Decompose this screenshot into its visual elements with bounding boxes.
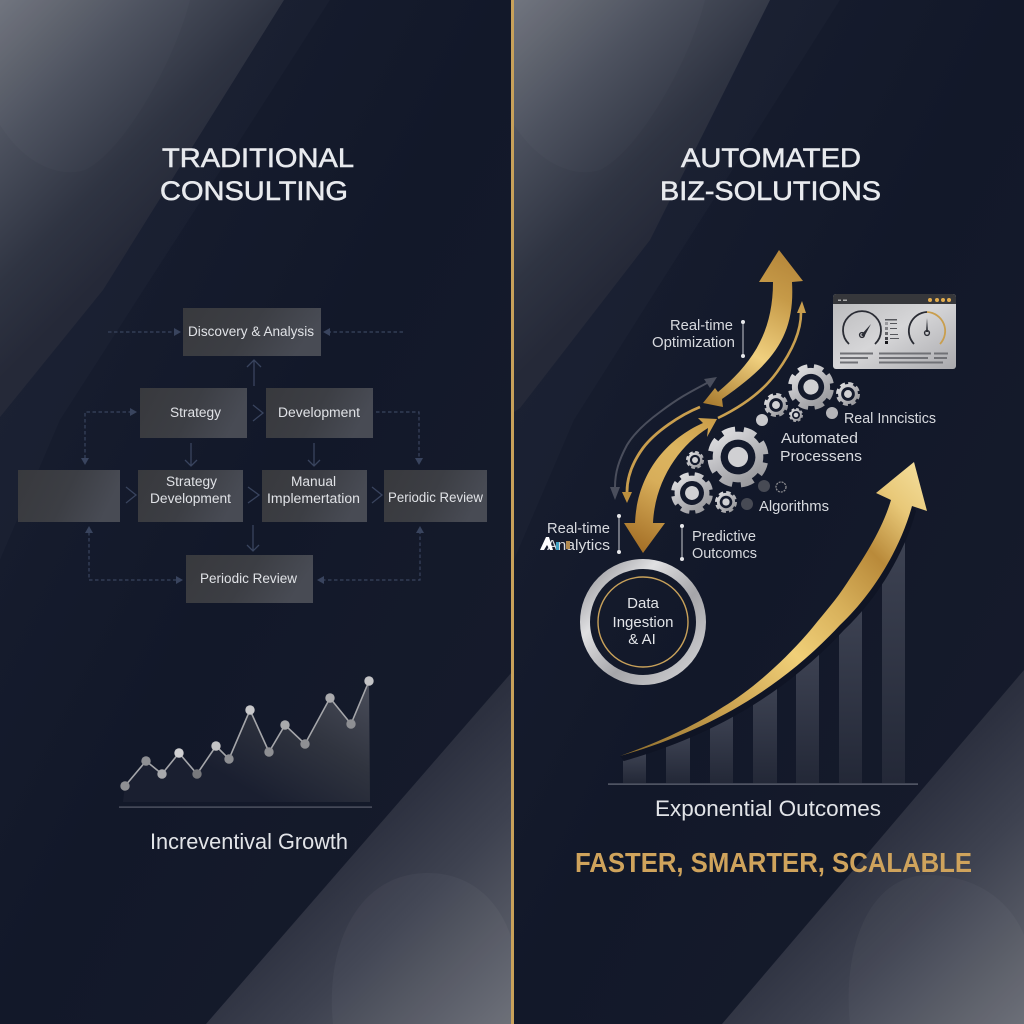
bar chart: exponential outcomes bbox=[608, 542, 918, 785]
arrow: down to periodic review bbox=[247, 525, 259, 551]
label: predictive outcomcs bbox=[680, 524, 757, 562]
box: strategy: Strategy bbox=[170, 405, 221, 420]
gauge: right bbox=[909, 312, 945, 344]
icon: data ingestion ring bbox=[585, 564, 701, 680]
ring text: Data bbox=[627, 595, 659, 612]
arrow: chevron row three bbox=[372, 487, 382, 503]
title: automated biz-solutions bbox=[660, 143, 881, 206]
arrow: large downward gold bbox=[624, 418, 717, 553]
ring text: Ingestion bbox=[613, 614, 673, 631]
label: predictive outcomcs: Predictive bbox=[692, 528, 756, 545]
tagline: FASTER, SMARTER, SCALABLE bbox=[575, 847, 972, 878]
caption: incremental growth: Increventival Growth bbox=[150, 829, 348, 854]
arrow: chevron row two bbox=[248, 487, 259, 503]
arrow: dashed into discovery right bbox=[323, 328, 403, 336]
label: real-time analytics: Real-time bbox=[547, 520, 610, 537]
label: real-time optimization: Optimization bbox=[652, 334, 735, 351]
label: real-time analytics: Analytics bbox=[547, 537, 610, 554]
title: traditional consulting bbox=[160, 143, 354, 206]
arrow: dashed strategy loop bbox=[81, 408, 137, 465]
box: manual implementation: Implemertation bbox=[267, 491, 360, 506]
box: manual implementation: Manual bbox=[291, 474, 336, 489]
box: manual implementation bbox=[262, 470, 367, 522]
box: strategy bbox=[140, 388, 247, 438]
box: periodic review bottom: Periodic Review bbox=[200, 571, 297, 586]
label: real-time optimization: Real-time bbox=[670, 317, 733, 334]
arrow: large upward gold bbox=[703, 250, 803, 407]
center divider bbox=[511, 0, 514, 1024]
arrow: gray two-way bbox=[610, 377, 717, 500]
title: traditional consulting: CONSULTING bbox=[160, 176, 348, 206]
box: development bbox=[266, 388, 373, 438]
label: real inncistics: Real Inncistics bbox=[844, 410, 936, 427]
label: algorithms: Algorithms bbox=[759, 498, 829, 515]
arrow: dashed into discovery left bbox=[108, 328, 181, 336]
icon: gear cluster bbox=[671, 364, 859, 514]
icon: dashboard panel bbox=[833, 294, 956, 369]
box: periodic review right bbox=[384, 470, 487, 522]
label: automated processens bbox=[780, 430, 862, 465]
box: periodic review bottom bbox=[186, 555, 313, 603]
label: predictive outcomcs: Outcomcs bbox=[692, 545, 757, 562]
box: discovery and analysis: Discovery & Analysis bbox=[188, 324, 314, 339]
title: traditional consulting: TRADITIONAL bbox=[162, 143, 354, 173]
arrow: chevron row one bbox=[126, 487, 136, 503]
line chart: incremental growth bbox=[119, 676, 374, 808]
box: blank bbox=[18, 470, 120, 522]
arrow: dashed development loop bbox=[376, 412, 423, 465]
box: discovery and analysis bbox=[183, 308, 321, 356]
title: automated biz-solutions: AUTOMATED bbox=[681, 143, 861, 173]
ring text bbox=[613, 595, 673, 648]
arrow: strategy down bbox=[185, 443, 197, 466]
gauge: left bbox=[843, 311, 881, 344]
box: development: Development bbox=[278, 405, 360, 420]
arrow: up to discovery bbox=[247, 360, 261, 386]
caption: exponential outcomes: Exponential Outcomes bbox=[655, 796, 881, 821]
ring text: & AI bbox=[628, 631, 656, 648]
box: strategy development bbox=[138, 470, 243, 522]
label: real-time analytics bbox=[540, 514, 621, 554]
arrow: exponential growth curve bbox=[620, 462, 927, 761]
arrow: thin gold upward bbox=[718, 301, 806, 418]
title: automated biz-solutions: BIZ-SOLUTIONS bbox=[660, 176, 881, 206]
box: periodic review right: Periodic Review bbox=[388, 490, 483, 505]
arrow: thin gold downward bbox=[622, 407, 700, 503]
arrow: dashed bottom left loop bbox=[85, 526, 183, 584]
background: left panel bbox=[0, 0, 512, 1024]
background: right panel bbox=[514, 0, 1024, 1024]
box: strategy development: Development bbox=[150, 491, 231, 506]
text lines bbox=[840, 352, 948, 364]
arrow: chevron strategy to development bbox=[253, 405, 263, 421]
flowchart: traditional process bbox=[18, 308, 487, 603]
legend list bbox=[885, 319, 899, 344]
arrow: dashed bottom right loop bbox=[317, 526, 424, 584]
label: real-time optimization bbox=[652, 317, 745, 358]
label: automated processens: Automated bbox=[781, 430, 858, 447]
box: strategy development: Strategy bbox=[166, 474, 217, 489]
label: automated processens: Processens bbox=[780, 448, 862, 465]
arrow: development down bbox=[308, 443, 320, 466]
